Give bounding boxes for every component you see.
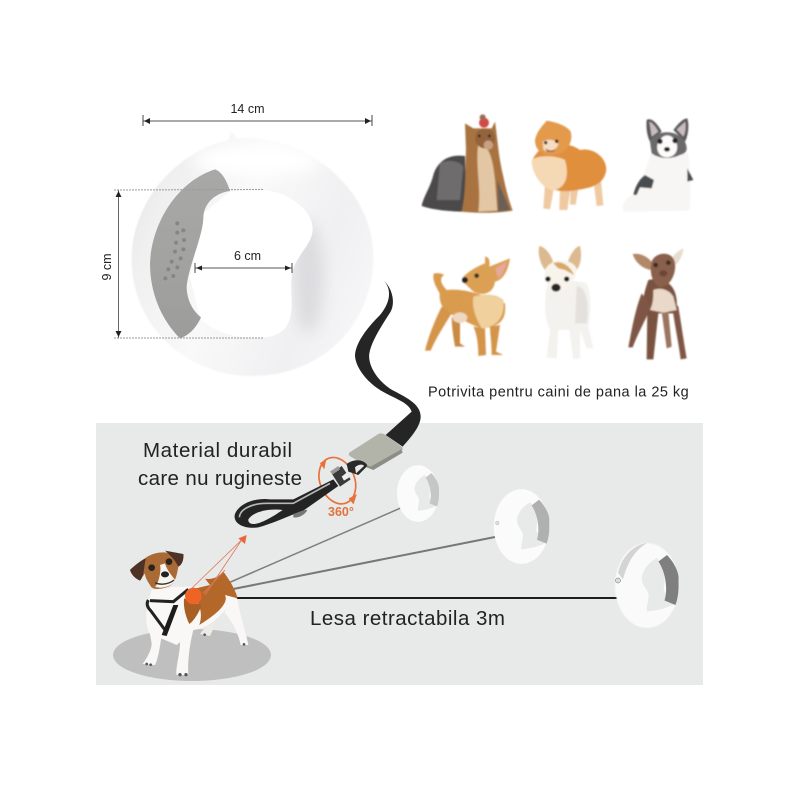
heading: durable material: care nu rugineste	[138, 467, 302, 490]
caption: suitable for dogs up to 25 kg: Potrivita pentru caini de pana la 25 kg	[428, 384, 689, 400]
dimension: 14 cm width: 14 cm	[230, 102, 265, 116]
heading: durable material: Material durabil	[143, 439, 292, 462]
dog wearing harness	[130, 535, 248, 676]
dog floor shadow	[113, 629, 271, 681]
rotation indicator	[312, 452, 362, 509]
dog: pomeranian	[532, 121, 606, 210]
dogs: six small breeds	[422, 114, 693, 359]
dog: white chihuahua	[539, 246, 593, 359]
paws	[145, 633, 245, 676]
dog: brown chihuahua	[628, 248, 687, 359]
dog tail and brown saddle	[188, 572, 238, 625]
retraction lines from dog to handles	[200, 507, 618, 598]
heading: retractable leash 3m: Lesa retractabila 3m	[310, 607, 505, 630]
product: main leash handle ring	[132, 132, 373, 376]
grip dots	[163, 221, 186, 280]
heading: durable material	[138, 439, 302, 490]
dimension: 9 cm height	[100, 190, 264, 338]
orange direction arrows	[190, 538, 243, 595]
snap hook	[347, 460, 367, 475]
dog body	[143, 587, 248, 675]
ring shading	[193, 143, 323, 333]
leash buckle	[349, 433, 403, 470]
dog: long-haired chihuahua	[623, 118, 693, 212]
grey grip	[150, 169, 230, 338]
ring hole	[190, 189, 313, 337]
handle: medium position	[494, 489, 549, 564]
dimension: 6 cm hole	[195, 249, 292, 273]
dog head	[130, 552, 183, 589]
dimension: 9 cm height: 9 cm	[100, 253, 114, 281]
orange leash attachment marker	[185, 588, 202, 604]
dimension: 14 cm width	[143, 102, 372, 126]
handle: large, near position	[615, 543, 679, 628]
dog: tan chihuahua	[425, 257, 510, 356]
ring body	[132, 132, 373, 376]
panel: retractable leash demo background	[96, 423, 703, 685]
dog: yorkshire terrier	[422, 114, 513, 213]
leash strap	[355, 281, 421, 447]
label: 360 degrees: 360°	[328, 505, 354, 519]
handle: small, far position	[397, 465, 439, 522]
metal snap hook with 360 degree swivel	[235, 452, 367, 528]
dimension: 6 cm hole: 6 cm	[234, 249, 261, 263]
harness	[147, 589, 188, 636]
